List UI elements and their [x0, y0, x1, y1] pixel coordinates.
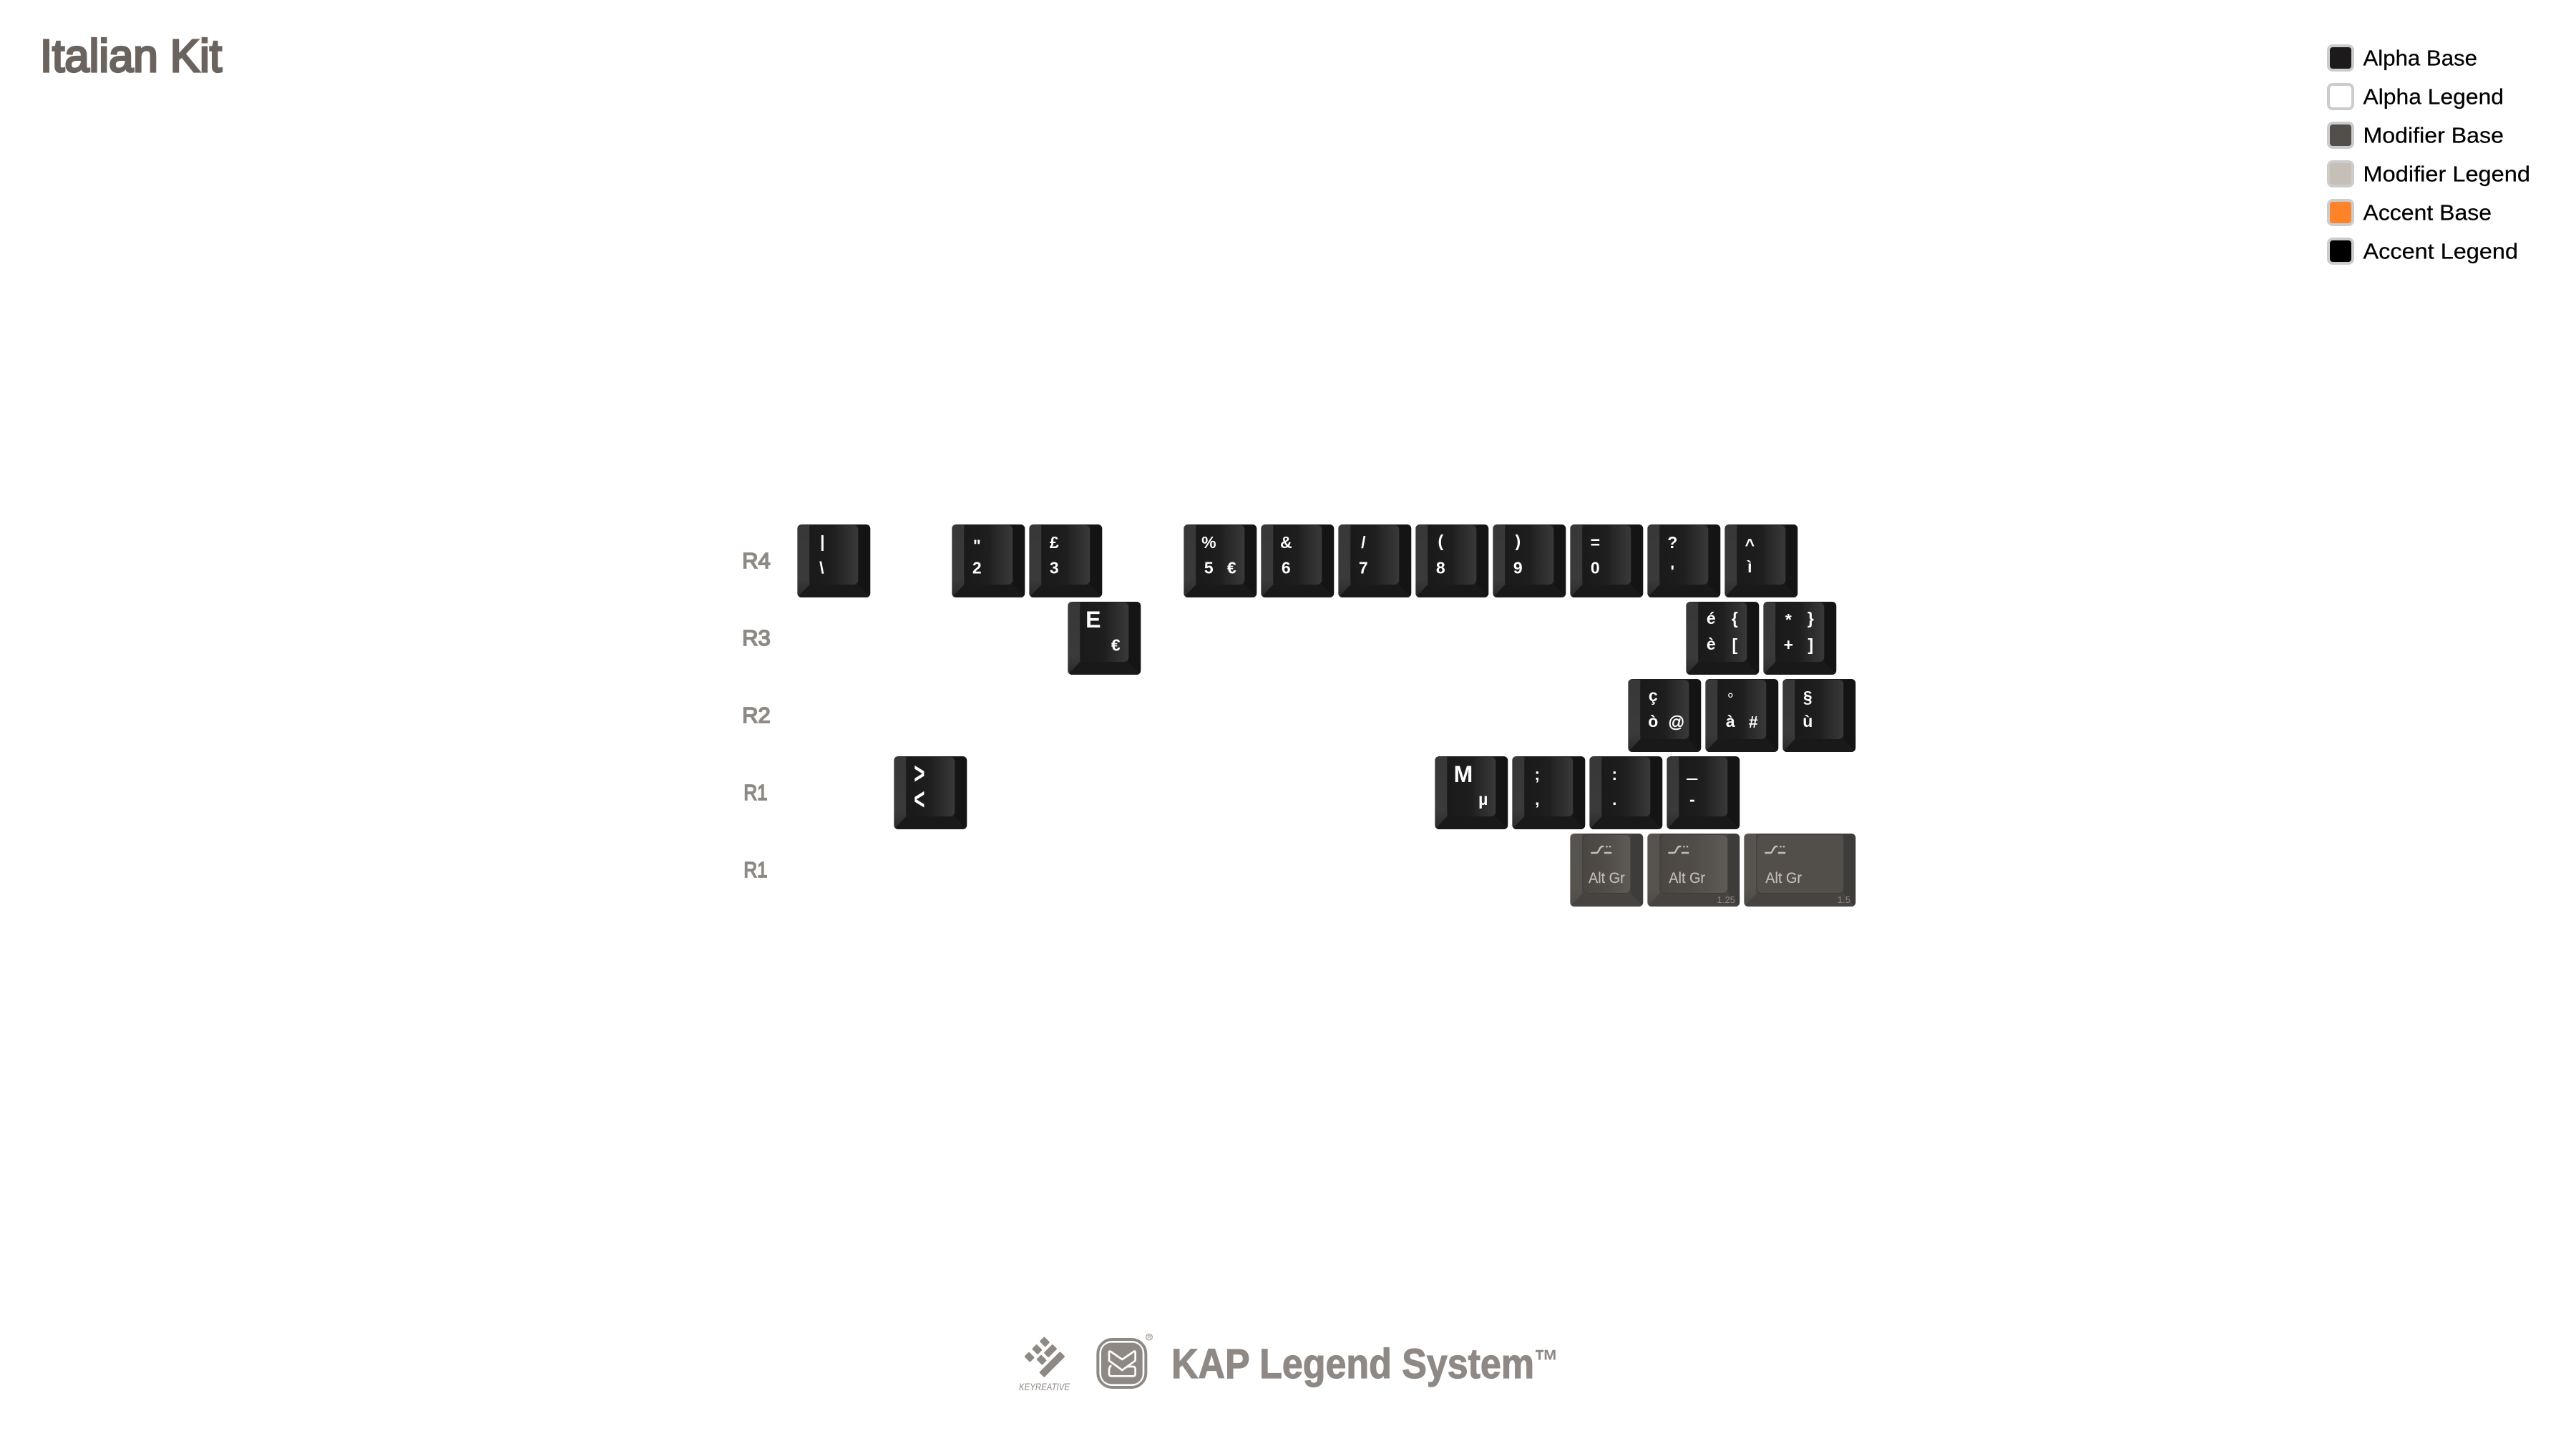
key: e acute / e grave / braces: è [1707, 635, 1716, 653]
key: paren close / 9 [1493, 524, 1566, 597]
key: question / apostrophe: ' [1671, 562, 1674, 581]
keys: row R4 [797, 524, 1797, 597]
key: M / micro [1435, 756, 1508, 829]
key: colon / period: . [1612, 790, 1616, 809]
key: E / euro: € [1111, 635, 1121, 654]
registered mark: R [1147, 1334, 1151, 1340]
trademark sign: ™ [1534, 1344, 1558, 1379]
key: Alt Gr 1u [1570, 834, 1643, 907]
wordmark: KAP Legend System: KAP Legend System [1171, 1341, 1534, 1387]
keys: Alt Gr row [1570, 834, 1855, 907]
key: paren open / 8: ( [1438, 532, 1443, 550]
legend item: Accent Legend: Accent Legend [2363, 239, 2518, 264]
row label R2: R2 [742, 703, 771, 728]
key: M / micro: M [1454, 761, 1473, 787]
row label R3: R3 [742, 625, 771, 650]
key: asterisk / plus / close braces: ] [1807, 635, 1813, 654]
key: pipe / backslash [797, 524, 870, 597]
key: caret / i grave [1724, 524, 1797, 597]
key: Alt Gr 1.25u: Alt Gr [1669, 870, 1705, 887]
icon: Keyreative logo [1024, 1337, 1065, 1377]
key: caret / i grave: ^ [1745, 535, 1755, 554]
legend item: Alpha Legend: Alpha Legend [2363, 84, 2504, 109]
key: c cedilla / o grave / at: ò [1648, 712, 1658, 731]
key: paren open / 8: 8 [1436, 558, 1445, 577]
key: e acute / e grave / braces: { [1732, 609, 1738, 627]
key: percent / 5 / euro: % [1201, 533, 1216, 552]
legend item: Alpha Base: Alpha Base [2363, 46, 2477, 71]
key: ampersand / 6 [1261, 524, 1334, 597]
key: e acute / e grave / braces: [ [1732, 635, 1737, 654]
key: Alt Gr 1.5u: Alt Gr [1765, 870, 1802, 887]
key: underscore / hyphen [1667, 756, 1740, 829]
key: Alt Gr 1.25u: 1.25 [1717, 894, 1735, 905]
legend [2328, 46, 2530, 264]
key: slash / 7: 7 [1359, 558, 1368, 577]
legend item: Modifier Base: Modifier Base [2363, 123, 2504, 148]
key: degree / a grave / hash [1705, 679, 1778, 752]
key: M / micro: µ [1478, 790, 1488, 809]
row label R4: R4 [742, 548, 771, 573]
keys: row R1 [894, 756, 1740, 829]
key: pipe / backslash: | [820, 532, 825, 551]
key: colon / period: : [1611, 765, 1617, 783]
key: ampersand / 6: 6 [1282, 558, 1291, 577]
key: degree / a grave / hash: à [1726, 712, 1735, 731]
key: section / u grave [1782, 679, 1855, 752]
key: semicolon / comma [1512, 756, 1585, 829]
key: greater / less: < [914, 783, 924, 816]
key: percent / 5 / euro [1184, 524, 1257, 597]
key: e acute / e grave / braces: é [1707, 609, 1716, 627]
key: E / euro: E [1085, 607, 1101, 633]
key: section / u grave: ù [1802, 712, 1813, 731]
key: paren open / 8 [1415, 524, 1488, 597]
row labels [742, 548, 771, 883]
key: asterisk / plus / close braces: * [1785, 610, 1792, 629]
title: Italian Kit [40, 30, 222, 82]
row label R1: R1 [743, 781, 768, 806]
key: greater / less [894, 756, 967, 829]
key: paren close / 9: ) [1515, 532, 1521, 550]
key: quote / 2 [952, 524, 1025, 597]
key: pipe / backslash: \ [819, 558, 824, 577]
key: pound / 3 [1029, 524, 1102, 597]
keys: row R2 [1628, 679, 1855, 752]
key: ampersand / 6: & [1280, 533, 1292, 552]
key: asterisk / plus / close braces: + [1784, 635, 1793, 654]
keys: row R3 [1068, 602, 1836, 675]
key: c cedilla / o grave / at: ç [1649, 686, 1658, 705]
key: semicolon / comma: ; [1534, 765, 1540, 783]
key: percent / 5 / euro: 5 [1204, 558, 1214, 577]
legend item: Accent Base: Accent Base [2363, 200, 2492, 225]
icon: KAP badge logo [1098, 1334, 1152, 1387]
key: colon / period [1589, 756, 1662, 829]
key: semicolon / comma: , [1535, 790, 1539, 809]
key: degree / a grave / hash: # [1749, 713, 1758, 731]
key: equals / 0: 0 [1591, 558, 1600, 577]
key: underscore / hyphen: - [1689, 790, 1695, 809]
key: c cedilla / o grave / at [1628, 679, 1701, 752]
key: percent / 5 / euro: € [1227, 558, 1236, 577]
key: equals / 0: = [1591, 533, 1600, 552]
key: caret / i grave: ì [1747, 557, 1752, 576]
key: pound / 3: £ [1050, 533, 1059, 552]
footer branding [1019, 1334, 1558, 1392]
row label R1 lower: R1 [743, 858, 768, 883]
key: question / apostrophe: ? [1667, 533, 1677, 552]
key: e acute / e grave / braces [1686, 602, 1759, 675]
key: Alt Gr 1.25u [1647, 834, 1740, 907]
key: asterisk / plus / close braces [1763, 602, 1836, 675]
key: pound / 3: 3 [1050, 558, 1059, 577]
key: E / euro [1068, 602, 1141, 675]
key: section / u grave: § [1803, 688, 1813, 706]
key: slash / 7: / [1361, 533, 1366, 552]
key: question / apostrophe [1647, 524, 1720, 597]
key: paren close / 9: 9 [1513, 558, 1523, 577]
key: Alt Gr 1.5u: 1.5 [1838, 894, 1850, 905]
key: underscore / hyphen: _ [1687, 761, 1698, 781]
wordmark: KEYREATIVE: KEYREATIVE [1019, 1382, 1070, 1392]
key: quote / 2: " [973, 537, 981, 555]
key: degree / a grave / hash: ° [1727, 690, 1734, 708]
key: c cedilla / o grave / at: @ [1668, 713, 1684, 731]
key: greater / less: > [914, 758, 924, 791]
key: Alt Gr 1.5u [1744, 834, 1855, 907]
key: Alt Gr 1u: Alt Gr [1589, 870, 1625, 887]
key: equals / 0 [1570, 524, 1643, 597]
key: asterisk / plus / close braces: } [1807, 609, 1814, 627]
key: quote / 2: 2 [972, 558, 982, 577]
key: slash / 7 [1338, 524, 1411, 597]
legend item: Modifier Legend: Modifier Legend [2363, 162, 2530, 187]
